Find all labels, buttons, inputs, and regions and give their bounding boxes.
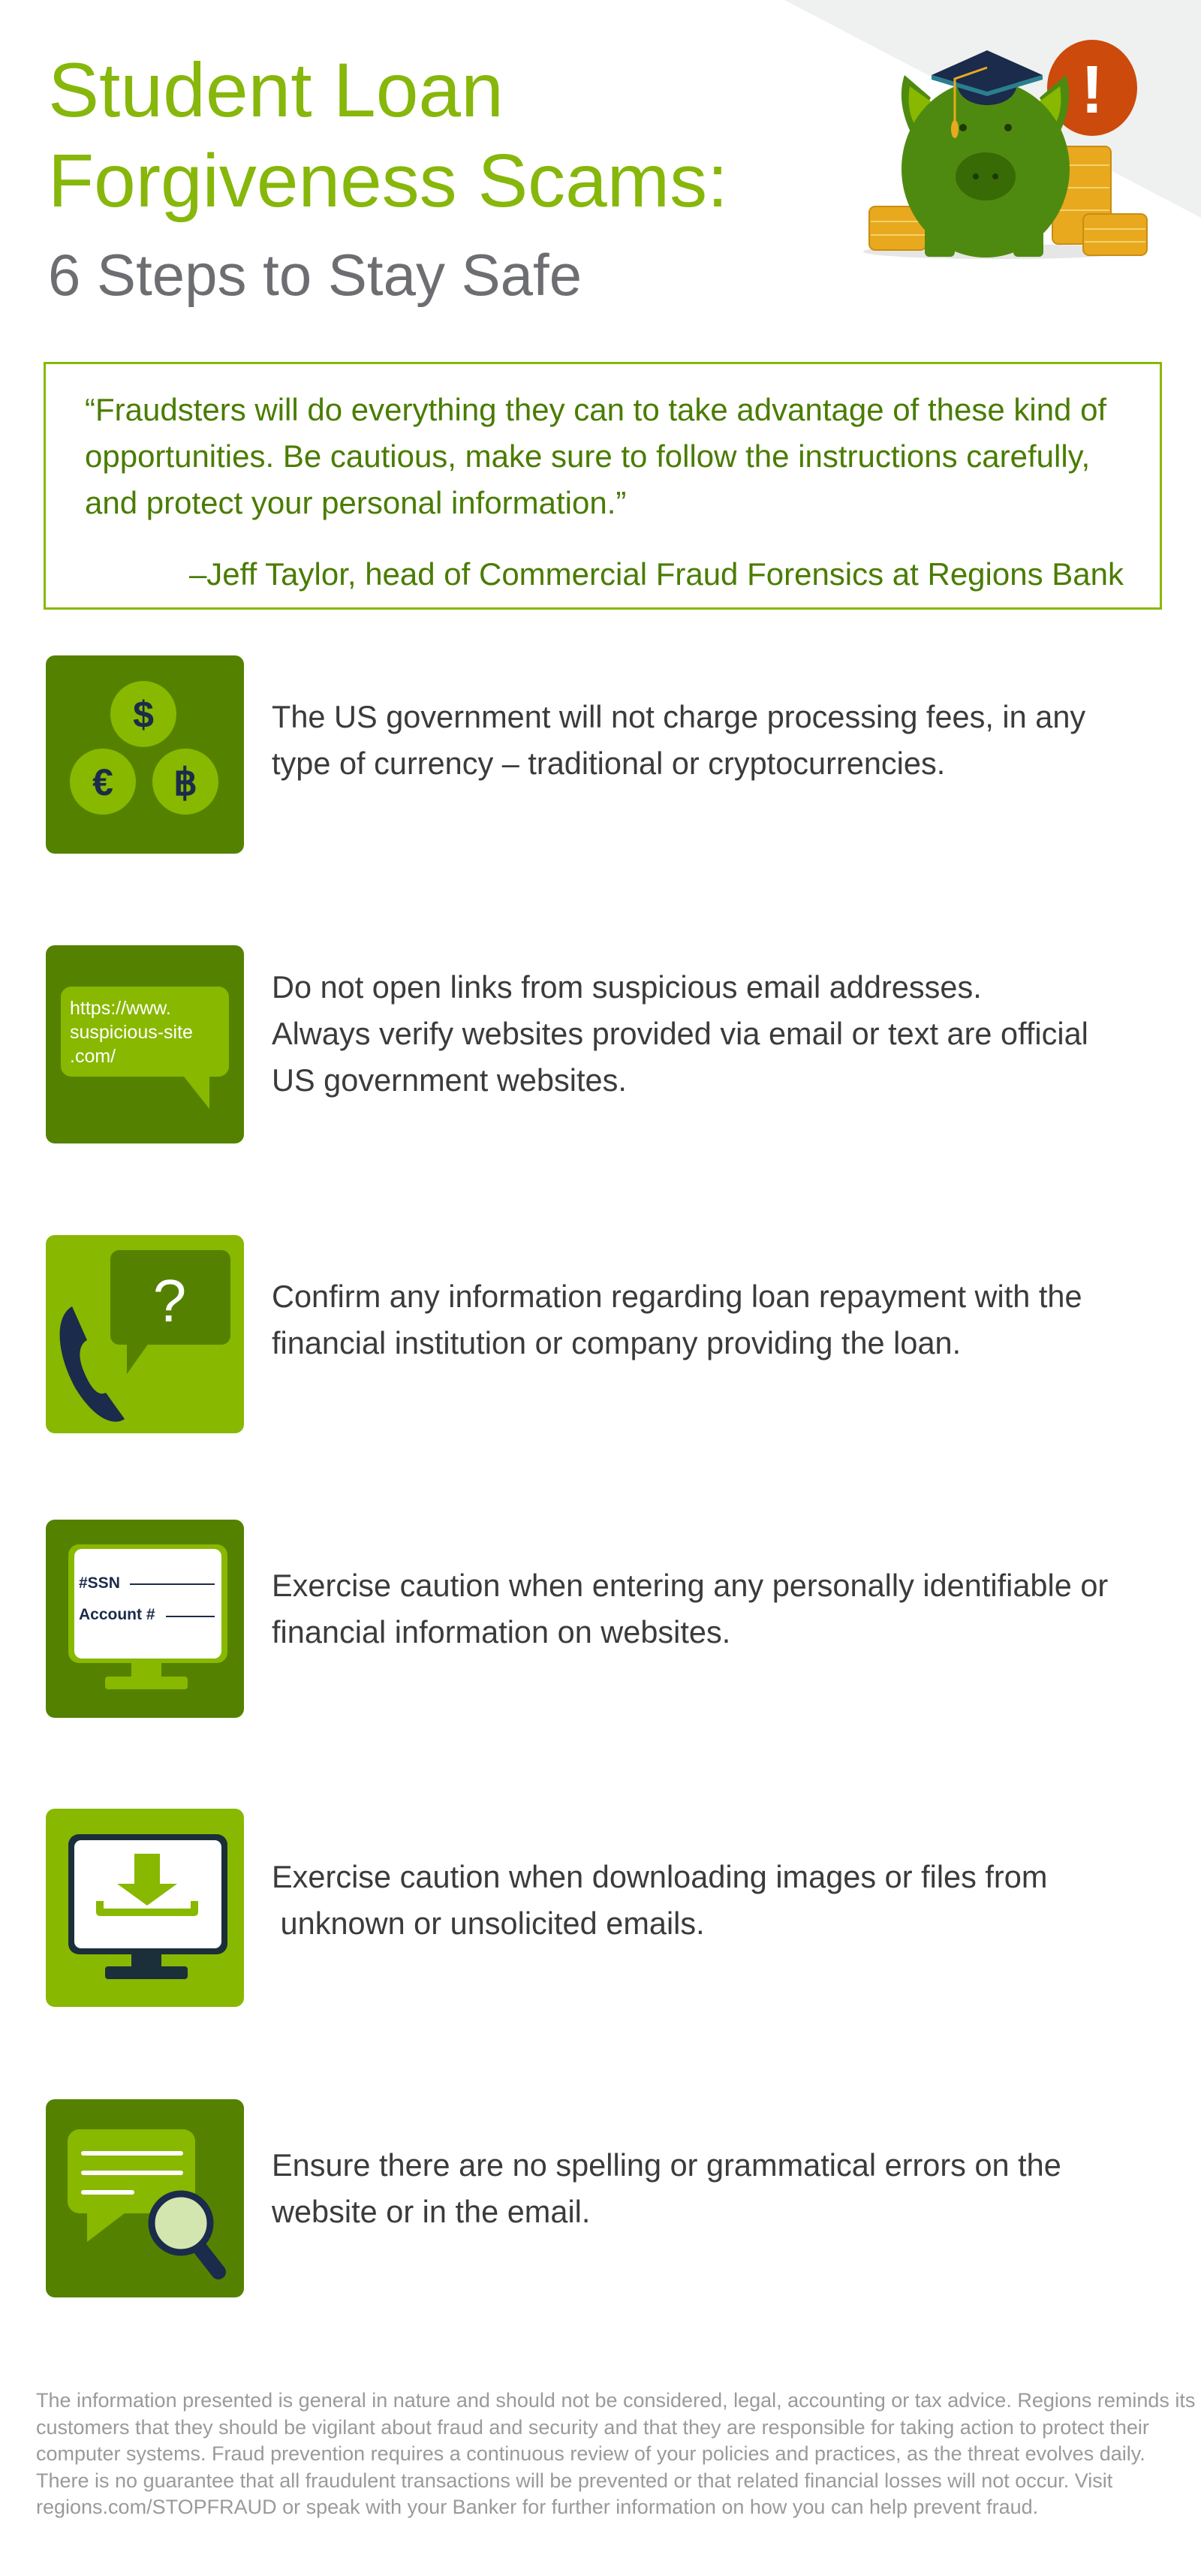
icon: phone with question	[46, 1235, 244, 1433]
icon: suspicious link bubble: https://www.	[70, 998, 171, 1019]
footer disclaimer: The information presented is general in nature and should not be considered, legal, accounting or tax advice. Regions reminds its	[36, 2389, 1195, 2412]
subtitle: 6 Steps to Stay Safe	[48, 242, 582, 308]
icon: currencies: $	[133, 694, 154, 736]
quote text: and protect your personal information.”	[85, 485, 626, 520]
footer disclaimer: computer systems. Fraud prevention requires a continuous review of your policies and practices, as the threat evolves daily.	[36, 2442, 1145, 2465]
quote text: opportunities. Be cautious, make sure to follow the instructions carefully,	[85, 438, 1090, 474]
icon: monitor with SSN form: #SSN	[79, 1574, 120, 1592]
callout: quote	[44, 362, 1162, 610]
icon: suspicious link bubble: suspicious-site	[70, 1022, 193, 1043]
icon: monitor with SSN form: Account #	[79, 1606, 155, 1623]
footer disclaimer: regions.com/STOPFRAUD or speak with your Banker for further information on how you can help prevent fraud.	[36, 2496, 1038, 2518]
quote text	[85, 392, 1106, 520]
footer disclaimer	[36, 2389, 1195, 2518]
title: Forgiveness Scams:	[48, 139, 728, 223]
step 3 text	[272, 1279, 1082, 1360]
icon: monitor with SSN form	[46, 1520, 244, 1718]
step 6 text: Ensure there are no spelling or grammatical errors on the	[272, 2147, 1061, 2183]
icon: currencies: €	[92, 761, 113, 803]
step 2 text: Always verify websites provided via email or text are official	[272, 1016, 1088, 1051]
icon: currencies: ฿	[173, 761, 197, 803]
icon: piggy bank with graduation cap	[863, 40, 1148, 259]
step 1 text: The US government will not charge processing fees, in any	[272, 699, 1085, 734]
step 5 text	[272, 1859, 1047, 1941]
icon: message with magnifier	[46, 2099, 244, 2297]
quote text: “Fraudsters will do everything they can to take advantage of these kind of	[85, 392, 1106, 427]
icon: download monitor	[46, 1809, 244, 2007]
step 4 text	[272, 1568, 1108, 1650]
background triangle	[785, 0, 1201, 218]
step 5 text: Exercise caution when downloading images or files from	[272, 1859, 1047, 1894]
step 1 text: type of currency – traditional or cryptocurrencies.	[272, 746, 945, 781]
step 6 text	[272, 2147, 1061, 2229]
icon: suspicious link bubble: .com/	[70, 1046, 116, 1067]
icon: currencies	[46, 655, 244, 854]
step 1 text	[272, 699, 1085, 781]
icon: piggy bank with graduation cap: !	[1081, 53, 1103, 128]
step 3 text: financial institution or company providing the loan.	[272, 1325, 961, 1360]
step 3 text: Confirm any information regarding loan repayment with the	[272, 1279, 1082, 1314]
title: Student Loan	[48, 47, 504, 133]
step 2 text: US government websites.	[272, 1062, 627, 1098]
step 2 text	[272, 969, 1088, 1098]
step 5 text: unknown or unsolicited emails.	[281, 1906, 705, 1941]
step 4 text: financial information on websites.	[272, 1614, 730, 1650]
icon: phone with question: ?	[153, 1267, 186, 1334]
step 4 text: Exercise caution when entering any personally identifiable or	[272, 1568, 1108, 1603]
footer disclaimer: There is no guarantee that all fraudulent transactions will be prevented or that related financial losses will not occur. Visit	[36, 2469, 1112, 2491]
step 6 text: website or in the email.	[272, 2194, 590, 2229]
footer disclaimer: customers that they should be vigilant about fraud and security and that they are responsible for taking action to protect their	[36, 2416, 1149, 2439]
step 2 text: Do not open links from suspicious email addresses.	[272, 969, 982, 1005]
quote attribution: –Jeff Taylor, head of Commercial Fraud Forensics at Regions Bank	[189, 556, 1124, 592]
title	[48, 47, 728, 308]
alert badge	[1047, 40, 1137, 136]
icon: suspicious link bubble	[46, 945, 244, 1143]
